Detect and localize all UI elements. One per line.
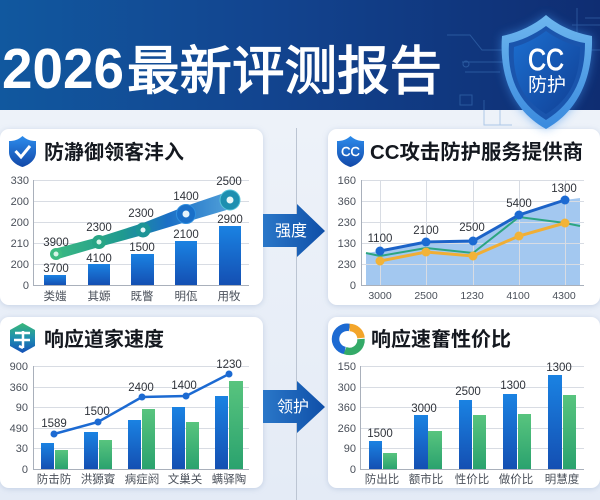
y axis labels: 130 <box>338 238 356 250</box>
y axis labels <box>11 175 29 292</box>
value labels: 2100 <box>173 229 199 241</box>
area <box>366 198 580 285</box>
y axis labels: 210 <box>11 238 29 250</box>
value labels: 1300 <box>551 183 577 195</box>
category labels: 明佤 <box>174 290 198 303</box>
category labels: 明慧度 <box>545 472 580 486</box>
y axis labels: 360 <box>338 402 356 414</box>
value labels: 1500 <box>367 428 393 440</box>
y axis labels: 360 <box>10 382 28 394</box>
category labels <box>44 289 241 303</box>
y axis labels: 260 <box>338 423 356 435</box>
category labels: 洪獂賨 <box>81 472 115 486</box>
arrow: protection <box>263 381 325 433</box>
circuit decoration <box>447 8 600 125</box>
arrow: strength: 强度 <box>275 222 307 240</box>
value labels: 1300 <box>546 362 572 374</box>
icon: shield check <box>9 136 36 167</box>
chart: multi-line with area <box>338 175 584 302</box>
bars <box>44 226 241 285</box>
category labels: 既瞥 <box>130 290 154 303</box>
category labels: 性价比 <box>455 472 489 486</box>
value labels: 1100 <box>368 233 392 245</box>
category labels: 2500 <box>414 290 438 302</box>
y axis labels: 0 <box>350 464 356 476</box>
arrow: protection: 领护 <box>277 398 309 416</box>
category labels <box>37 472 246 486</box>
green bars <box>383 395 576 469</box>
category labels: 用牧 <box>218 289 241 303</box>
trend line <box>50 370 232 438</box>
chart: grouped bars with line <box>10 359 249 486</box>
y axis labels: 900 <box>10 361 28 373</box>
value labels: 2500 <box>216 176 242 188</box>
icon: CC shield: CC <box>341 144 360 159</box>
value labels: 2400 <box>128 382 154 394</box>
category labels: 防击防 <box>37 472 71 486</box>
title: 2026 <box>2 37 124 101</box>
icon: CC protection shield badge <box>502 15 592 129</box>
category labels <box>365 472 580 486</box>
value labels: 2300 <box>128 208 154 220</box>
category labels: 4300 <box>552 290 576 302</box>
chart: grouped bars <box>338 361 584 486</box>
value labels: 2900 <box>217 214 243 226</box>
value labels <box>367 362 572 440</box>
value labels: 1400 <box>173 191 199 203</box>
category labels: 防出比 <box>365 472 399 486</box>
value labels: 2300 <box>86 222 112 234</box>
value labels: 1300 <box>500 380 526 392</box>
center divider line <box>296 128 298 500</box>
y axis labels: 200 <box>11 259 29 271</box>
blue bars <box>41 396 228 469</box>
value labels: 3000 <box>411 403 437 415</box>
value labels: 2100 <box>413 225 439 237</box>
badge text: 防护 <box>528 74 566 96</box>
y axis labels: 150 <box>338 361 356 373</box>
value labels: 2500 <box>455 386 481 398</box>
value labels: 3700 <box>43 263 69 275</box>
blue bars <box>369 375 562 469</box>
icon: hexagon <box>10 323 35 353</box>
yellow line <box>376 218 570 266</box>
category labels <box>368 290 576 302</box>
y axis labels <box>10 361 28 476</box>
category labels: 1230 <box>460 290 484 302</box>
y axis labels: 0 <box>350 280 356 292</box>
value labels <box>43 176 243 275</box>
value labels: 1500 <box>84 406 110 418</box>
value labels: 2500 <box>459 222 485 234</box>
y axis labels: 200 <box>11 217 29 229</box>
panel: response value ratio <box>328 317 600 488</box>
y axis labels: 360 <box>338 196 356 208</box>
value labels: 5400 <box>506 198 532 210</box>
y axis labels: 90 <box>344 443 356 455</box>
y axis labels: 330 <box>11 175 29 187</box>
category labels: 类媸 <box>44 289 67 303</box>
blue line <box>376 196 570 256</box>
category labels: 4100 <box>506 290 530 302</box>
panel heading: 响应道家速度 <box>44 327 164 351</box>
value labels <box>41 359 242 430</box>
value labels: 1230 <box>216 359 242 371</box>
value labels <box>368 183 577 245</box>
header banner <box>0 0 600 125</box>
green bars <box>55 381 243 469</box>
y axis labels <box>338 175 356 292</box>
y axis labels: 230 <box>338 217 356 229</box>
chart: bars with trend ribbon <box>11 175 249 303</box>
y axis labels <box>338 361 356 476</box>
panel heading: CC攻击防护服务提供商 <box>370 141 583 164</box>
category labels: 做价比 <box>499 472 533 486</box>
value labels: 1400 <box>171 380 197 392</box>
icon: CC shield <box>337 136 364 167</box>
icon: donut <box>336 327 361 351</box>
y axis labels: 160 <box>338 175 356 187</box>
category labels: 病症阏 <box>125 472 159 486</box>
y axis labels: 230 <box>338 259 356 271</box>
y axis labels: 490 <box>10 423 28 435</box>
category labels: 其嫄 <box>88 289 111 303</box>
title: 最新评测报告 <box>127 42 442 101</box>
panel heading: 响应速奮性价比 <box>371 327 511 351</box>
arrow: strength <box>263 204 325 257</box>
value labels: 1500 <box>129 242 155 254</box>
trend ribbon <box>50 190 240 260</box>
y axis labels: 30 <box>16 443 28 455</box>
panel: CC protection providers <box>328 129 600 305</box>
badge text <box>528 42 566 96</box>
y axis labels: 200 <box>11 196 29 208</box>
category labels: 3000 <box>368 290 392 302</box>
category labels: 螨驿陶 <box>212 472 246 486</box>
y axis labels: 300 <box>338 382 356 394</box>
green line <box>366 217 580 256</box>
category labels: 额市比 <box>409 472 443 486</box>
value labels: 3900 <box>43 237 69 249</box>
panel: defense investment <box>0 129 263 305</box>
category labels: 文巢关 <box>168 472 203 486</box>
y axis labels: 90 <box>16 402 28 414</box>
value labels: 4100 <box>86 253 112 265</box>
badge text: CC <box>528 42 564 77</box>
y axis labels: 0 <box>23 280 29 292</box>
value labels: 1589 <box>41 418 67 430</box>
panel: response speed <box>0 317 263 488</box>
y axis labels: 0 <box>22 464 28 476</box>
panel heading: 防瀞御领客沣入 <box>44 140 184 164</box>
